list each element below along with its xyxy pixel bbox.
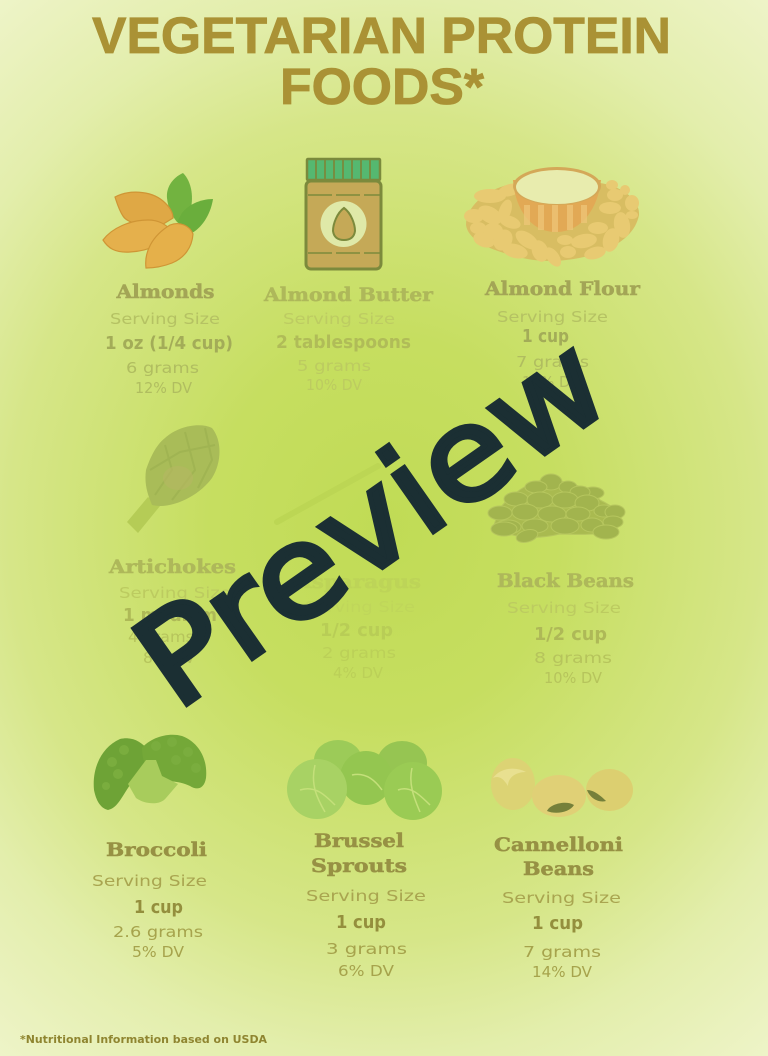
- name: Cannelloni: [494, 834, 623, 856]
- panel: brussel sprouts: [287, 740, 442, 980]
- serving amount: 1 cup: [522, 326, 569, 347]
- serving label: Serving Size: [110, 310, 220, 328]
- daily value: 4% DV: [333, 664, 384, 682]
- icon: bowl of almond flour on almonds: [464, 167, 639, 269]
- name: Asparagus: [294, 571, 421, 593]
- grams: 5 grams: [297, 357, 371, 375]
- panel: almonds: [103, 173, 233, 397]
- daily value: 5% DV: [132, 943, 185, 961]
- grams: 4 grams: [128, 628, 194, 646]
- footnote: *Nutritional Information based on USDA: [20, 1034, 268, 1046]
- name: Broccoli: [106, 839, 207, 861]
- name: Artichokes: [108, 556, 236, 578]
- serving label: Serving Size: [497, 308, 608, 326]
- panel: black beans: [488, 474, 634, 687]
- serving amount: 1 medium: [123, 605, 217, 626]
- panel: cannelloni beans: [491, 758, 633, 981]
- serving label: Serving Size: [502, 889, 621, 907]
- name, second line: Beans: [523, 858, 594, 880]
- grams: 3 grams: [326, 940, 407, 958]
- serving label: Serving Size: [119, 584, 231, 602]
- preview watermark: Preview: [108, 307, 634, 737]
- name: Black Beans: [497, 570, 634, 592]
- panel: broccoli: [92, 735, 207, 961]
- serving label: Serving Size: [305, 598, 415, 616]
- daily value: 12% DV: [135, 379, 193, 397]
- icon: cannelloni beans: [491, 758, 633, 817]
- name: Almonds: [115, 281, 214, 303]
- serving amount: 1 cup: [532, 913, 583, 934]
- serving amount: 1 oz (1/4 cup): [105, 333, 233, 354]
- title: VEGETARIAN PROTEIN: [92, 7, 671, 64]
- icon: artichoke: [127, 425, 220, 533]
- title: FOODS*: [280, 58, 484, 115]
- serving label: Serving Size: [92, 872, 207, 890]
- panel: almond flour: [464, 167, 641, 391]
- serving label: Serving Size: [306, 887, 426, 905]
- daily value: 10% DV: [544, 669, 603, 687]
- panel: almond butter: [263, 159, 434, 394]
- icon: almonds with leaves: [103, 173, 213, 268]
- panel: asparagus: [277, 466, 421, 682]
- grams: 7 grams: [516, 353, 589, 371]
- panel: artichokes: [108, 425, 236, 667]
- icon: asparagus: [277, 466, 378, 522]
- icon: broccoli: [94, 735, 206, 810]
- daily value: 6% DV: [338, 962, 395, 980]
- name: Brussel: [314, 830, 404, 852]
- grams: 7 grams: [523, 943, 601, 961]
- name: Almond Butter: [263, 284, 434, 306]
- name: Almond Flour: [484, 278, 641, 300]
- icon: brussel sprouts: [287, 740, 442, 820]
- name, second line: Sprouts: [311, 855, 407, 877]
- serving amount: 1/2 cup: [320, 620, 393, 641]
- daily value: 14% DV: [532, 963, 593, 981]
- grams: 6 grams: [126, 359, 199, 377]
- grams: 2.6 grams: [113, 923, 203, 941]
- serving label: Serving Size: [507, 599, 621, 617]
- daily value: 8% DV: [143, 649, 196, 667]
- daily value: 14% DV: [522, 373, 581, 391]
- serving amount: 1 cup: [134, 897, 183, 918]
- title: [92, 7, 671, 115]
- serving label: Serving Size: [283, 310, 395, 328]
- serving amount: 1/2 cup: [534, 624, 607, 645]
- icon: pile of black beans: [488, 474, 625, 545]
- grams: 2 grams: [322, 644, 396, 662]
- serving amount: 2 tablespoons: [276, 332, 411, 353]
- daily value: 10% DV: [306, 376, 363, 394]
- icon: almond butter jar: [306, 159, 381, 269]
- grams: 8 grams: [534, 649, 612, 667]
- serving amount: 1 cup: [336, 912, 386, 933]
